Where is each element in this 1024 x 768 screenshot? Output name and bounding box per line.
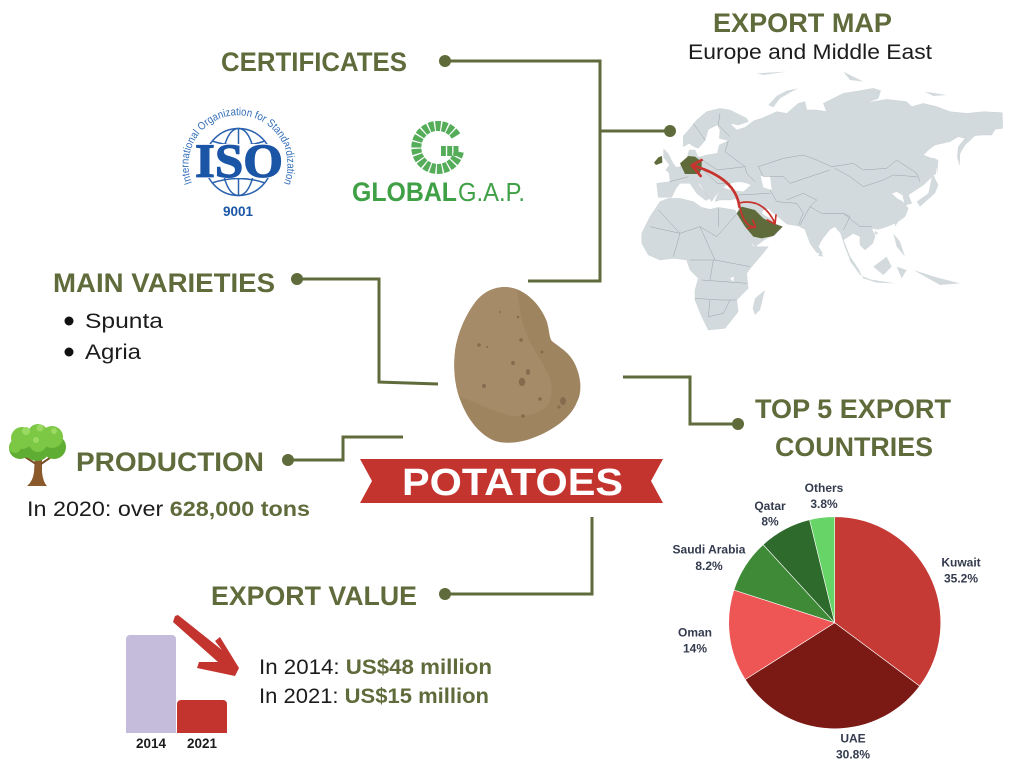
heading: top 5 export countries: TOP 5 EXPORT (755, 394, 951, 424)
highlighted country: Saudi Arabia (737, 207, 783, 238)
highlighted country: Ireland (654, 156, 662, 165)
title banner: potatoes (360, 459, 663, 504)
pie chart: export share by country (673, 481, 981, 762)
slice: Qatar (763, 520, 835, 623)
list: potato varieties: Spunta (85, 310, 163, 333)
pie labels: 8.2% (695, 559, 723, 573)
logo: GLOBALG.A.P.: G.A.P. (458, 177, 525, 207)
slice: Kuwait (835, 517, 941, 686)
text: export values (259, 656, 492, 708)
pie labels: 35.2% (944, 572, 978, 586)
logo: ISO 9001: International Organization for Standardization (182, 107, 295, 185)
export arrows (692, 160, 776, 228)
Africa landmass (642, 198, 768, 330)
highlighted country: Germany (680, 156, 702, 174)
logo: ISO 9001 (182, 107, 295, 219)
heading: main varieties: MAIN VARIETIES (53, 268, 275, 298)
bar chart: export value 2014 and 2021: 2021 (187, 736, 218, 751)
map: Europe, Africa, Middle East and Asia (642, 72, 1003, 330)
pie labels: Others (805, 481, 844, 495)
logo: ISO 9001: 9001 (223, 204, 254, 219)
arrow: decline (173, 615, 239, 676)
islands and inland seas (663, 72, 960, 315)
heading: top 5 export countries: COUNTRIES (775, 432, 933, 462)
illustration: potato (454, 287, 580, 443)
pie labels (673, 481, 981, 762)
pie labels: Kuwait (941, 556, 981, 570)
heading: export value: EXPORT VALUE (211, 581, 417, 611)
heading: export map: EXPORT MAP (713, 8, 892, 38)
logo: GLOBALG.A.P. (352, 126, 525, 207)
connector: production (282, 437, 403, 466)
tree icon (9, 424, 66, 486)
bar chart: export value 2014 and 2021: 2014 (136, 736, 167, 751)
slice: UAE (745, 623, 920, 729)
text: production value: In 2020: over 628,000 tons (27, 498, 310, 521)
list: potato varieties: Agria (85, 341, 141, 364)
pie labels: 14% (683, 642, 707, 656)
pie labels: UAE (840, 732, 866, 746)
connector: main varieties (291, 273, 438, 384)
pie labels: 8% (761, 514, 779, 528)
pie labels: 30.8% (836, 748, 870, 762)
pie labels: 3.8% (810, 497, 838, 511)
pie labels: Oman (678, 626, 712, 640)
Eurasia landmass (657, 88, 1003, 272)
list: potato varieties (64, 310, 163, 364)
text: export values: In 2014: US$48 million (259, 656, 492, 679)
slice: Oman (729, 590, 835, 680)
heading: top 5 export countries (755, 394, 951, 462)
country borders (650, 113, 920, 317)
text: export values: In 2021: US$15 million (259, 685, 489, 708)
slice: Saudi Arabia (734, 545, 835, 623)
pie labels: Saudi Arabia (673, 542, 746, 556)
heading: certificates: CERTIFICATES (221, 47, 407, 77)
logo: ISO 9001: ISO (195, 135, 283, 188)
pie labels: Qatar (754, 499, 786, 513)
heading: production: PRODUCTION (76, 447, 264, 477)
logo: GLOBALG.A.P.: GLOBAL (352, 177, 457, 207)
slice: Others (810, 517, 835, 623)
title banner: potatoes: POTATOES (402, 462, 623, 504)
connector: top 5 export countries (623, 377, 744, 430)
connector: export value (439, 517, 592, 600)
bar chart: export value 2014 and 2021 (126, 635, 227, 751)
subheading: export map region: Europe and Middle East (688, 41, 932, 64)
connector: certificates to map and potato (439, 55, 676, 281)
